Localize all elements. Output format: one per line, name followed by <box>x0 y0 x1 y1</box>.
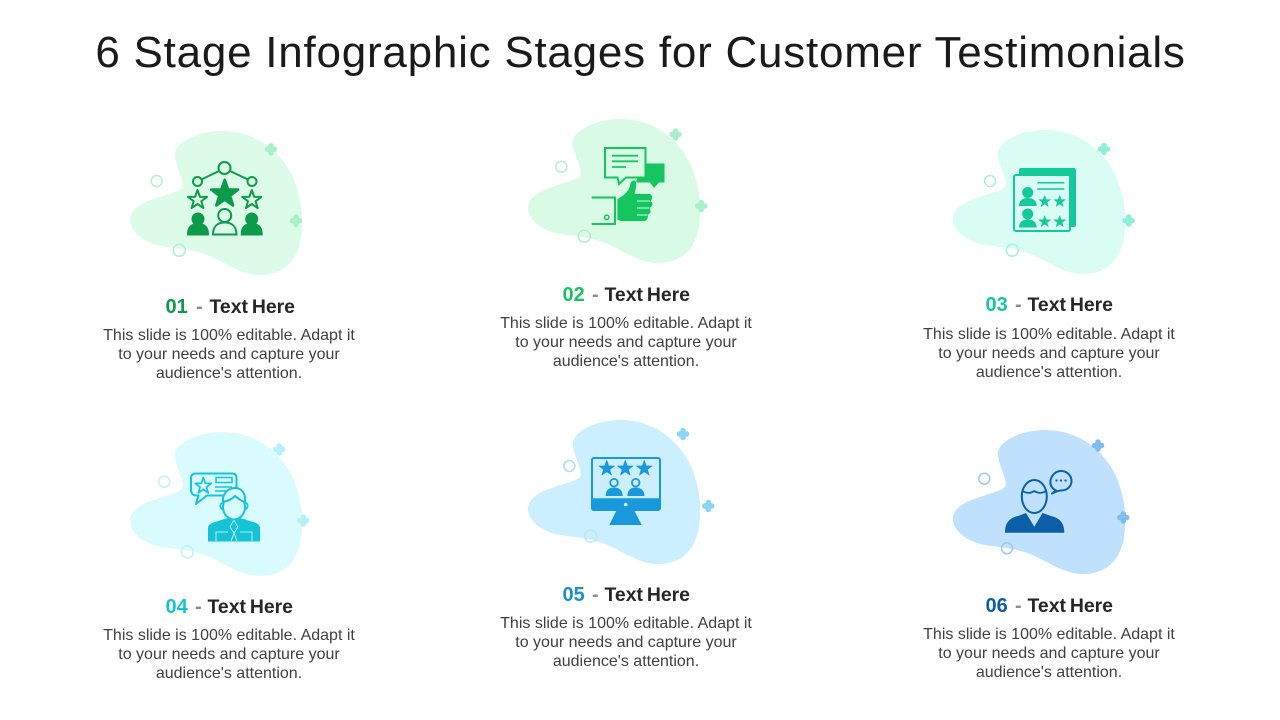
blob background 05 <box>528 420 700 564</box>
description 03: This slide is 100% editable. Adapt it <box>923 326 1175 343</box>
heading 01: 01 <box>166 296 188 318</box>
heading 02: 02 <box>562 284 585 306</box>
heading 03: - <box>1015 294 1022 316</box>
blob background 04 <box>130 432 302 576</box>
description 06: to your needs and capture your <box>938 645 1160 662</box>
description 02: This slide is 100% editable. Adapt it <box>500 315 752 332</box>
heading 04: 04 <box>166 596 189 618</box>
title: 6 Stage Infographic Stages for Customer Testimonials <box>95 28 1186 77</box>
description 01: This slide is 100% editable. Adapt it <box>103 327 355 344</box>
heading 02: Text Here <box>604 284 690 306</box>
heading 02: - <box>592 284 599 306</box>
heading 01: Text Here <box>210 296 295 318</box>
panel: stage 01 <box>103 131 355 382</box>
panel: stage 04 <box>103 432 355 682</box>
description 03: to your needs and capture your <box>938 345 1160 362</box>
decorations 04 <box>159 446 307 558</box>
heading 03: Text Here <box>1028 294 1113 316</box>
icon: monitor with star ratings <box>592 458 660 525</box>
decorations 06 <box>979 442 1127 554</box>
icon: thumbs up with speech bubbles <box>592 148 664 224</box>
heading 03: 03 <box>986 294 1008 316</box>
description 01: audience's attention. <box>156 365 302 382</box>
blob background 01 <box>130 131 302 275</box>
description 02: audience's attention. <box>553 353 699 370</box>
heading 05: - <box>592 584 599 606</box>
description 05: This slide is 100% editable. Adapt it <box>500 615 752 632</box>
panel: stage 03 <box>923 130 1175 381</box>
blob background 03 <box>953 130 1125 274</box>
blob background 02 <box>528 119 700 263</box>
description 06: audience's attention. <box>976 664 1122 681</box>
description 01: to your needs and capture your <box>118 346 340 363</box>
description 04: audience's attention. <box>156 665 302 682</box>
decorations 01 <box>151 146 300 256</box>
icon: customer with star review bubble <box>191 474 260 542</box>
heading 01: - <box>196 296 203 318</box>
heading 06: - <box>1015 595 1022 617</box>
heading 06: 06 <box>986 595 1008 617</box>
icon: review cards <box>1014 168 1076 231</box>
panel: stage 02 <box>500 119 752 370</box>
description 03: audience's attention. <box>976 364 1122 381</box>
heading 05: Text Here <box>604 584 690 606</box>
decorations 03 <box>984 146 1132 256</box>
heading 06: Text Here <box>1028 595 1113 617</box>
icon: network of stars and people <box>188 162 262 234</box>
heading 04: - <box>195 596 202 618</box>
heading 05: 05 <box>562 584 585 606</box>
description 04: to your needs and capture your <box>118 646 340 663</box>
panel: stage 06 <box>923 430 1175 681</box>
description 05: to your needs and capture your <box>515 634 737 651</box>
heading 04: Text Here <box>208 596 293 618</box>
description 05: audience's attention. <box>553 653 699 670</box>
blob background 06 <box>953 430 1125 574</box>
decorations 05 <box>564 430 712 542</box>
description 02: to your needs and capture your <box>515 334 737 351</box>
icon: customer speaking <box>1005 471 1072 533</box>
decorations 02 <box>556 131 705 242</box>
description 04: This slide is 100% editable. Adapt it <box>103 627 355 644</box>
description 06: This slide is 100% editable. Adapt it <box>923 626 1175 643</box>
panel: stage 05 <box>500 420 752 670</box>
